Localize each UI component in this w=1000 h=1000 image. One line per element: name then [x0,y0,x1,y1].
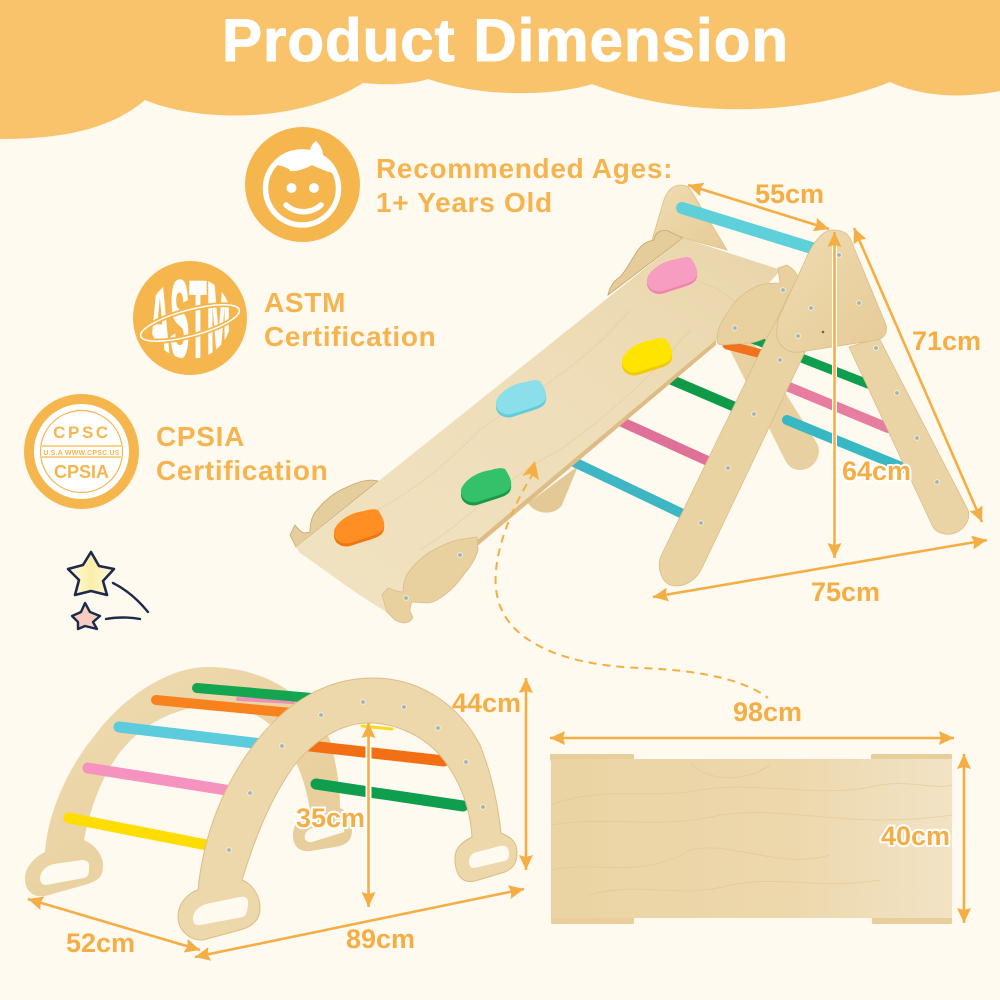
arrow: 71cm [854,228,982,522]
badge: recommended ages [245,127,673,242]
near arch right foot hole [469,846,509,868]
label: 52cm: 52cm [66,928,135,958]
icon: CPSC seal: CPSIA [54,462,109,482]
product: rocking arch [25,667,517,940]
near arch [178,678,517,940]
flange: top left [550,754,634,761]
arrow: 52cm [28,899,200,950]
gusset plate [777,230,887,352]
text: ASTM: ASTM [264,287,346,318]
label: 64cm: 64cm [842,456,911,486]
arch screws [227,700,485,852]
climbing pads [334,257,697,546]
pad: green [461,468,511,505]
coloured rods [574,208,904,515]
icon: ASTM logo: ASTM [149,258,231,380]
arrow: 44cm [525,678,527,870]
screws [404,253,939,600]
badge: ASTM certification [133,258,436,380]
badge: CPSIA certification [24,394,328,509]
product: flat ramp top view [550,754,952,924]
dimensions: triangle [653,179,987,607]
arrow: 89cm [195,889,524,957]
ramp far flange bottom [290,480,378,547]
label: 75cm: 75cm [811,577,880,607]
icon: child face [245,127,360,242]
icon: CPSC seal: U.S.A WWW.CPSC.US [43,450,120,457]
icon: shooting stars [68,552,148,629]
ramp edge [392,339,716,618]
label: 98cm: 98cm [733,697,802,727]
brown marker dot [822,331,824,333]
pad: cyan [496,380,546,417]
label: 44cm: 44cm [452,688,521,718]
near left leg [659,305,806,586]
far A-frame apex [652,185,727,250]
far arch left foot hole [40,860,89,885]
arrow: 98cm [550,737,954,739]
far arch right foot hole [305,822,344,842]
label: 40cm: 40cm [881,821,950,851]
text: recommended ages: Recommended Ages: [376,153,673,184]
far legs [730,340,819,470]
ramp near flange top [717,265,798,345]
dashed connector arrow [496,461,768,698]
arrow: 35cm [367,723,370,907]
arrow: 55cm [688,185,829,229]
badge: ASTM certification: Certification [264,321,436,352]
near right leg [849,338,969,534]
ramp far flange top [608,230,683,295]
flange: bottom left [551,917,634,924]
label: 71cm: 71cm [912,326,981,356]
pad: orange [334,509,384,546]
arch rods [69,688,463,846]
header banner [0,0,1000,139]
ramp near flange bottom [382,537,478,623]
arrow: 40cm [963,754,965,923]
text: CPSIA: CPSIA [156,421,245,452]
badge: CPSIA certification: Certification [156,455,328,486]
arrow: 64cm halo [832,238,837,552]
wood grain [551,762,952,895]
label: 55cm: 55cm [755,179,824,209]
arrow: 75cm [653,540,987,597]
flange: top right [871,754,952,760]
icon: CPSC seal [24,394,139,509]
dimensions: arch [28,678,526,958]
ramp board [296,238,781,613]
label: 35cm: 35cm [296,803,365,833]
flange: bottom right [872,917,952,924]
label: 89cm: 89cm [346,924,415,954]
far arch [25,667,352,896]
badge: recommended ages: 1+ Years Old [376,187,553,218]
dimensions: flat ramp [550,697,964,923]
arrow: 64cm [833,232,836,558]
arrow: 35cm halo [366,730,372,900]
pad: pink [647,257,697,294]
board [551,759,952,918]
product: triangle climber with ramp [290,185,969,623]
near arch left foot hole [193,897,248,925]
icon: CPSC seal: CPSC [53,423,111,442]
pad: yellow [622,338,672,375]
title: Product Dimension [222,7,788,74]
